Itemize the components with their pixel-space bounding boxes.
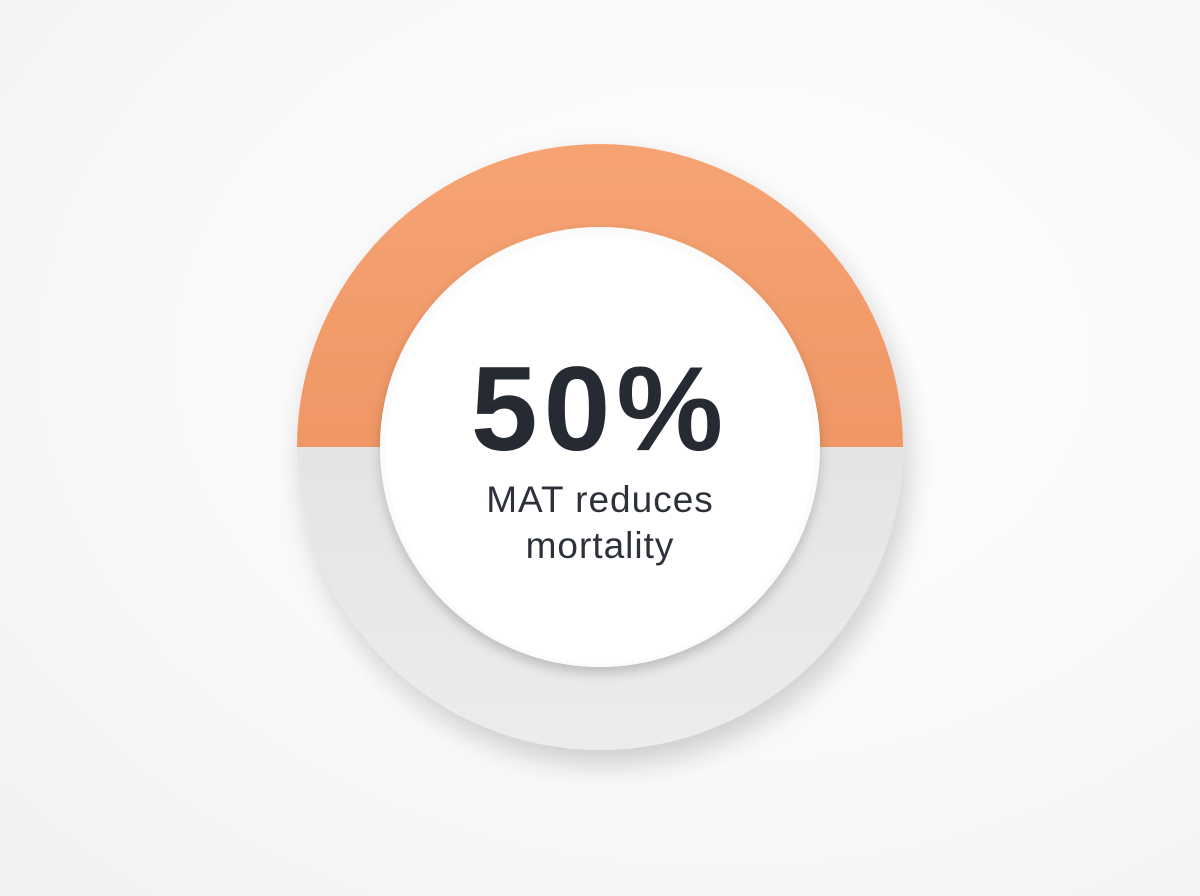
stat caption xyxy=(486,479,714,566)
stat value: 50% xyxy=(471,342,729,476)
ring xyxy=(297,144,903,750)
segment: gray remainder xyxy=(297,447,903,750)
stat caption: mortality xyxy=(526,525,674,566)
segment: orange 50% xyxy=(297,144,903,447)
inner disc xyxy=(380,227,820,667)
stat caption: MAT reduces xyxy=(486,479,714,520)
